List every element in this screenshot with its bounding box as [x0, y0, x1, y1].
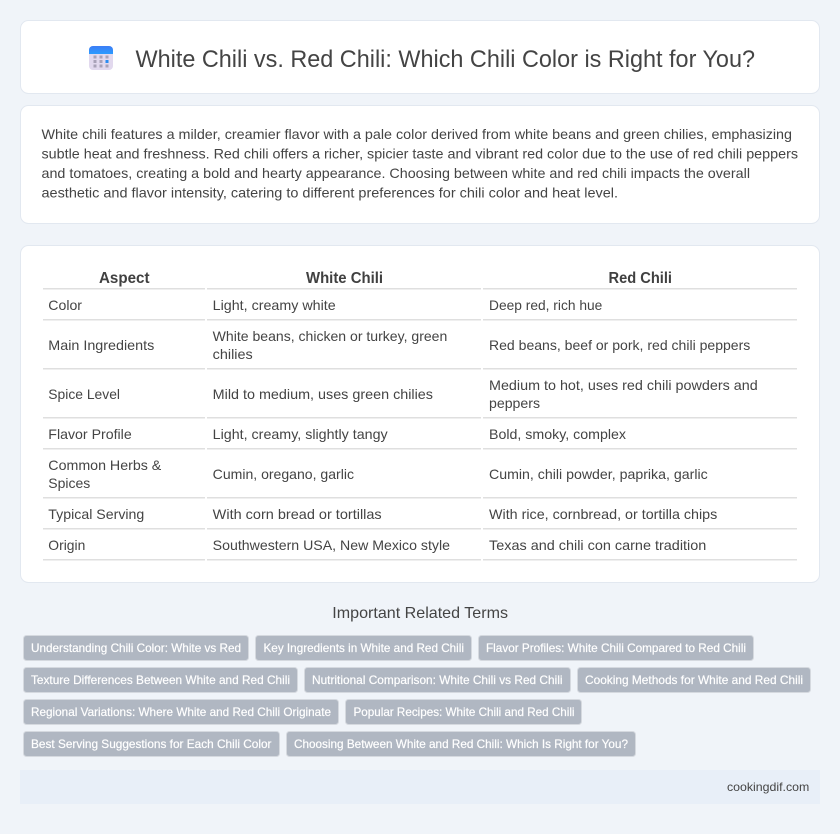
tag: Key Ingredients in White and Red Chili	[264, 641, 464, 655]
table row: typical serving	[48, 506, 717, 522]
table row: common herbs and spices: Spices	[48, 475, 90, 491]
panel: header	[20, 20, 820, 94]
tag	[578, 668, 810, 692]
tag	[304, 668, 570, 692]
table row: main ingredients: chilies	[213, 346, 253, 362]
tag	[24, 732, 280, 756]
tag	[478, 636, 754, 660]
icon: calendar	[89, 46, 113, 70]
table row: origin: Texas and chili con carne tradition	[489, 537, 706, 553]
table row: main ingredients: Main Ingredients	[48, 337, 154, 353]
table row: spice level	[48, 377, 758, 411]
table row: typical serving: Typical Serving	[48, 506, 144, 522]
tag: Regional Variations: Where White and Red Chili Originate	[31, 705, 331, 719]
table header row: Aspect	[99, 270, 150, 287]
table header row	[99, 270, 672, 287]
panel: intro text	[20, 106, 820, 224]
table row: origin: Southwestern USA, New Mexico style	[213, 537, 450, 553]
tag	[286, 732, 636, 756]
table row: flavor profile: Light, creamy, slightly tangy	[213, 426, 388, 442]
table row: common herbs and spices: Cumin, oregano, garlic	[213, 466, 354, 482]
table row: common herbs and spices: Cumin, chili powder, paprika, garlic	[489, 466, 708, 482]
tag: Texture Differences Between White and Red Chili	[31, 673, 290, 687]
table row: spice level: Spice Level	[48, 386, 120, 402]
panel: related term tags	[24, 636, 810, 756]
table row: flavor profile: Bold, smoky, complex	[489, 426, 626, 442]
table row: main ingredients: Red beans, beef or pork, red chili peppers	[489, 337, 750, 353]
tag	[24, 636, 248, 660]
text block: intro paragraph: aesthetic and flavor intensity, catering to different preferences for chili color and heat level.	[42, 184, 618, 200]
text block: intro paragraph: subtle heat and freshness. Red chili offers a richer, spicier taste and vibrant red color due to the use of red chili peppers	[42, 146, 798, 162]
table row: typical serving: With corn bread or tortillas	[213, 506, 382, 522]
tag	[24, 668, 298, 692]
panel: comparison table	[20, 246, 820, 582]
table row: origin	[48, 537, 706, 553]
title: White Chili vs. Red Chili: Which Chili Color is Right for You?	[136, 46, 755, 73]
table header row: White Chili	[306, 270, 383, 287]
tag: Best Serving Suggestions for Each Chili Color	[31, 737, 272, 751]
table row: color	[48, 297, 603, 313]
tag: Cooking Methods for White and Red Chili	[585, 673, 803, 687]
tag	[346, 700, 582, 724]
table row: color: Deep red, rich hue	[489, 297, 603, 313]
table row: typical serving: With rice, cornbread, or tortilla chips	[489, 506, 717, 522]
tag: Flavor Profiles: White Chili Compared to Red Chili	[486, 641, 746, 655]
text block: intro paragraph: White chili features a milder, creamier flavor with a pale color derived from white beans and green chilies, emphasizing	[42, 126, 792, 142]
table header row: Red Chili	[608, 270, 672, 287]
tag: Choosing Between White and Red Chili: Which Is Right for You?	[294, 737, 628, 751]
tag: Popular Recipes: White Chili and Red Chili	[354, 705, 574, 719]
table row: origin: Origin	[48, 537, 85, 553]
text block: intro paragraph: and tomatoes, creating a bold and hearty appearance. Choosing between white and red chili impacts the overall	[42, 165, 750, 181]
table row: color: Light, creamy white	[213, 297, 336, 313]
table row: common herbs and spices: Common Herbs &	[48, 457, 162, 473]
footer	[20, 770, 820, 804]
footer: cookingdif.com	[727, 780, 809, 794]
table row: main ingredients	[48, 328, 750, 362]
tag: Understanding Chili Color: White vs Red	[31, 641, 241, 655]
tag: Nutritional Comparison: White Chili vs Red Chili	[312, 673, 562, 687]
table row: common herbs and spices	[48, 457, 708, 491]
table row: spice level: Mild to medium, uses green chilies	[213, 386, 433, 402]
table row: color: Color	[48, 297, 82, 313]
table row: flavor profile	[48, 426, 626, 442]
heading: important related terms: Important Related Terms	[332, 605, 508, 622]
table row: main ingredients: White beans, chicken or turkey, green	[213, 328, 447, 344]
text block: intro paragraph	[42, 126, 798, 200]
table row: flavor profile: Flavor Profile	[48, 426, 132, 442]
tag	[24, 700, 338, 724]
table row: spice level: peppers	[489, 395, 540, 411]
table row: spice level: Medium to hot, uses red chili powders and	[489, 377, 758, 393]
tag	[256, 636, 472, 660]
